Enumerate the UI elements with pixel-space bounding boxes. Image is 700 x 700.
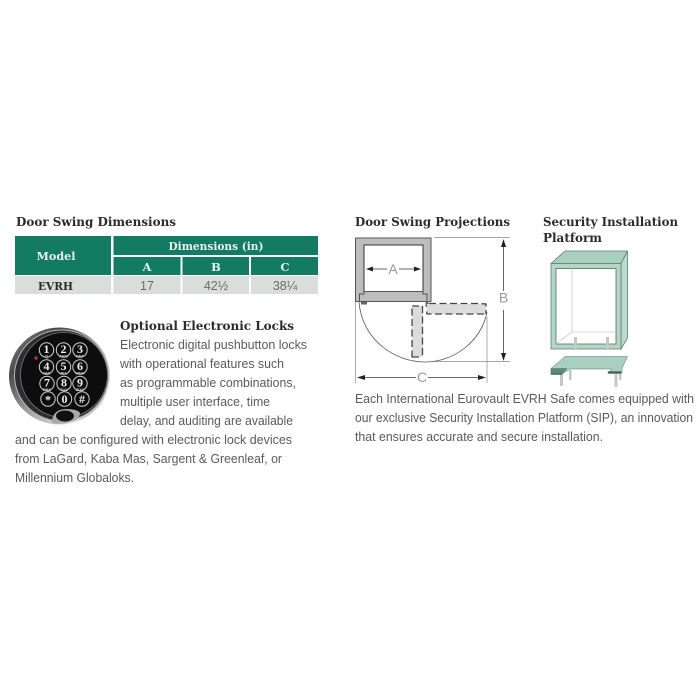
icon: electronic keypad lock: 9: [77, 376, 83, 390]
safe body: [356, 238, 431, 307]
table: door swing dimensions: B: [211, 260, 221, 274]
icon: electronic keypad lock: *: [45, 392, 51, 406]
table: door swing dimensions: C: [280, 260, 290, 274]
icon: electronic keypad lock: 2: [60, 342, 66, 356]
icon: electronic keypad lock: DEF: [76, 354, 85, 358]
text block: electronic locks description: with operational features such: [119, 357, 284, 371]
icon: electronic keypad lock: [9, 328, 110, 424]
heading: security installation platform: Security Installation: [543, 214, 678, 229]
dimension B: B: [499, 290, 508, 306]
icon: electronic keypad lock: GHI: [43, 370, 50, 376]
bolts: [560, 337, 622, 387]
dimension C: C: [417, 369, 427, 385]
dimension B: [433, 238, 510, 362]
text block: electronic locks description: Millennium Globaloks.: [15, 471, 134, 485]
table: door swing dimensions: Model: [36, 249, 76, 263]
dimension A: [366, 261, 421, 277]
door open positions: [412, 304, 486, 358]
table: door swing dimensions: 38¼: [273, 279, 298, 293]
icon: electronic keypad lock: 8: [61, 376, 67, 390]
text block: SIP description: Each International Eurovault EVRH Safe comes equipped with: [355, 392, 694, 406]
text block: SIP description: [355, 392, 694, 444]
table: door swing dimensions: 17: [140, 279, 154, 293]
table: door swing dimensions: 42½: [204, 279, 229, 293]
platform: [551, 356, 628, 374]
icon: electronic keypad lock: JKL: [60, 370, 68, 376]
text block: electronic locks description: [15, 338, 307, 485]
dimension A: A: [388, 261, 398, 277]
text block: electronic locks description: Electronic digital pushbutton locks: [120, 338, 307, 352]
dimension C: [356, 302, 487, 385]
icon: electronic keypad lock: Q: [45, 354, 48, 358]
text block: electronic locks description: delay, and auditing are available: [120, 414, 293, 428]
table: door swing dimensions: EVRH: [38, 279, 73, 293]
text block: electronic locks description: as programmable combinations,: [120, 376, 296, 390]
icon: electronic keypad lock: 5: [60, 359, 66, 373]
heading: door swing dimensions: Door Swing Dimensions: [16, 214, 176, 229]
icon: electronic keypad lock: #: [79, 392, 85, 406]
door swing arc: [359, 302, 487, 362]
text block: electronic locks description: multiple user interface, time: [120, 395, 270, 409]
icon: electronic keypad lock: 7: [44, 376, 50, 390]
icon: electronic keypad lock: 1: [44, 342, 50, 356]
text block: electronic locks description: and can be configured with electronic lock devices: [15, 433, 292, 447]
diagram: door swing projections: [356, 238, 510, 385]
icon: electronic keypad lock: ABC: [59, 354, 68, 358]
text block: electronic locks description: from LaGard, Kaba Mas, Sargent & Greenleaf, or: [15, 452, 282, 466]
icon: electronic keypad lock: WXY: [75, 387, 85, 392]
text block: SIP description: that ensures accurate and secure installation.: [355, 430, 603, 444]
safe box: [551, 251, 628, 349]
heading: security installation platform: [543, 214, 678, 245]
text block: SIP description: our exclusive Security Installation Platform (SIP), an innovation: [355, 411, 693, 425]
heading: door swing projections: Door Swing Projections: [355, 214, 510, 229]
table: door swing dimensions: [15, 236, 318, 294]
icon: electronic keypad lock: MNO: [75, 370, 85, 376]
table: door swing dimensions: A: [142, 260, 153, 274]
heading: optional electronic locks: Optional Electronic Locks: [120, 318, 294, 333]
diagram: security installation platform: [551, 251, 628, 387]
icon: electronic keypad lock: PRS: [43, 387, 51, 392]
table: door swing dimensions: Dimensions (in): [168, 239, 264, 253]
icon: electronic keypad lock: 4: [44, 359, 50, 373]
heading: security installation platform: Platform: [543, 230, 602, 245]
icon: electronic keypad lock: TUV: [60, 387, 68, 392]
icon: electronic keypad lock: 6: [77, 359, 83, 373]
icon: electronic keypad lock: 3: [77, 342, 83, 356]
icon: electronic keypad lock: 0: [62, 392, 68, 406]
